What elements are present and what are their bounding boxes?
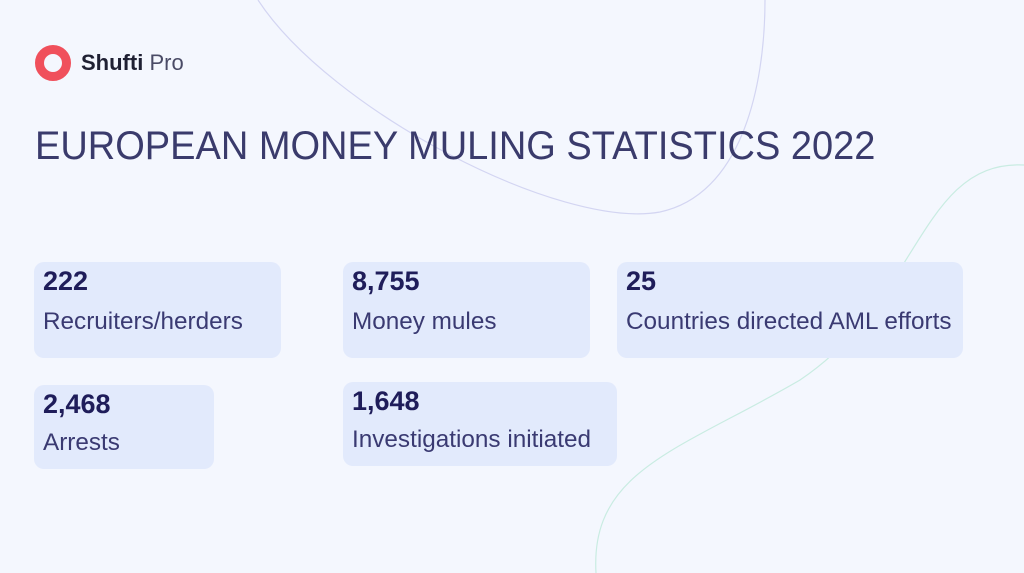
card: money mules: [343, 262, 590, 358]
logo text: Shufti Pro: [81, 50, 184, 75]
card: arrests: [34, 385, 214, 469]
logo: [35, 45, 184, 81]
card: investigations: [343, 382, 617, 466]
card: countries: [617, 262, 963, 358]
title: EUROPEAN MONEY MULING STATISTICS 2022: [35, 124, 875, 168]
icon: logo ring: [35, 45, 71, 81]
card: countries: 25: [626, 266, 656, 296]
card: recruiters: [34, 262, 281, 358]
card: investigations: 1,648: [352, 386, 420, 416]
card: countries: Countries directed AML efforts: [626, 308, 951, 335]
card: recruiters: 222: [43, 266, 88, 296]
card: money mules: 8,755: [352, 266, 420, 296]
card: recruiters: Recruiters/herders: [43, 308, 243, 335]
card: money mules: Money mules: [352, 308, 496, 335]
card: arrests: 2,468: [43, 389, 111, 419]
card: arrests: Arrests: [43, 429, 120, 456]
card: investigations: Investigations initiated: [352, 426, 591, 453]
